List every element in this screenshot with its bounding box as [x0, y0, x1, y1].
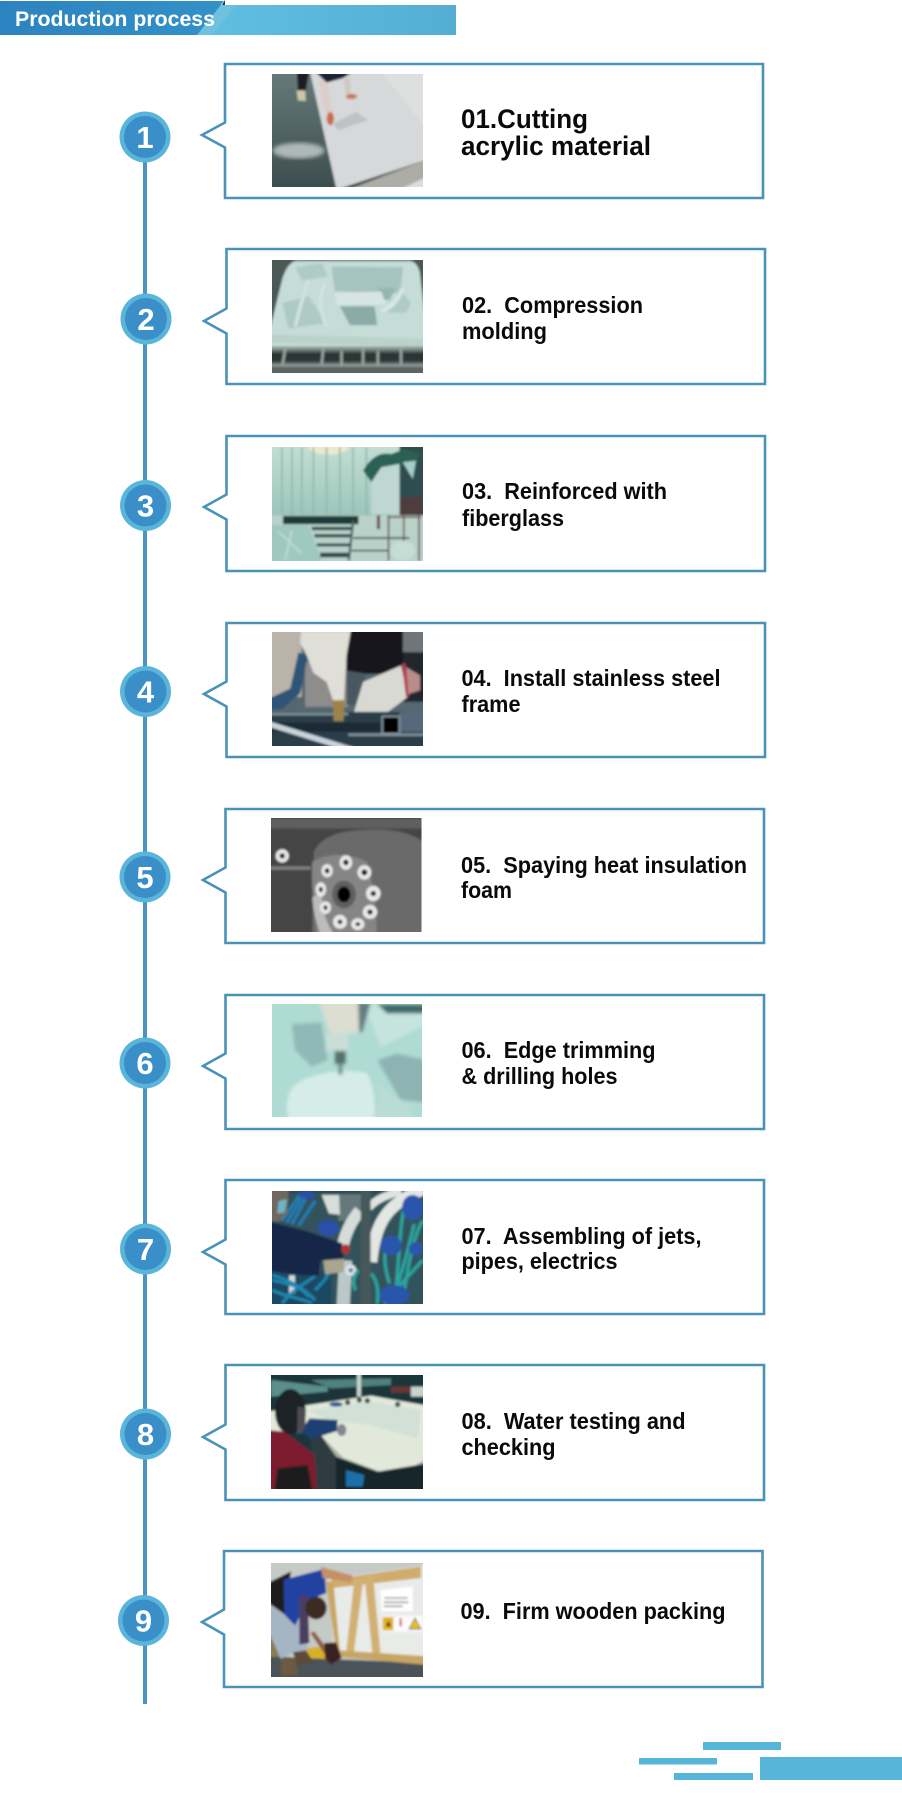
badge 6: [120, 1038, 170, 1088]
badge 4: 4: [137, 674, 155, 710]
photo: water testing: [271, 1375, 423, 1489]
photo: cutting acrylic: [272, 74, 423, 187]
step label 7: [462, 1223, 702, 1274]
heading: Production process: [15, 8, 215, 31]
step label 3: 03. Reinforced with: [462, 478, 667, 504]
badge 7: 7: [137, 1232, 154, 1267]
timeline line: [143, 137, 147, 1704]
step label 6: & drilling holes: [462, 1063, 618, 1089]
step label 5: foam: [461, 877, 512, 903]
step label 3: fiberglass: [462, 505, 564, 531]
photo: wooden packing: [271, 1563, 423, 1677]
photo: fiberglass workshop: [272, 447, 423, 561]
badge 4: [120, 666, 171, 717]
step label 3: [462, 478, 667, 531]
badge 5: [120, 852, 170, 902]
badge 6: 6: [136, 1046, 154, 1081]
step label 2: molding: [462, 318, 547, 344]
callout box 9: [202, 1551, 762, 1687]
panel: step 7: [120, 1180, 764, 1314]
step label 4: [462, 665, 720, 717]
step label 5: [461, 852, 747, 903]
step label 9: 09. Firm wooden packing: [460, 1598, 726, 1624]
photo: assembling jets and pipes: [272, 1191, 423, 1304]
step label 2: 02. Compression: [462, 292, 643, 318]
step label 8: checking: [462, 1434, 556, 1460]
callout box 8: [203, 1365, 764, 1500]
photo: insulation foam: [271, 818, 422, 932]
panel: step 9: [118, 1551, 762, 1687]
badge 1: 1: [136, 120, 154, 155]
panel: step 2: [120, 249, 765, 384]
badge 2: 2: [137, 302, 155, 337]
photo: installing steel frame: [272, 632, 423, 746]
step label 6: 06. Edge trimming: [462, 1037, 656, 1063]
badge 5: 5: [136, 860, 154, 895]
step label 7: 07. Assembling of jets,: [462, 1223, 702, 1249]
badge 3: 3: [137, 488, 154, 524]
callout box 7: [203, 1180, 764, 1314]
photo: compression molding: [272, 260, 423, 373]
photo: edge trimming: [272, 1004, 422, 1117]
badge 1: [120, 112, 170, 162]
callout box 6: [203, 995, 764, 1129]
step label 1: acrylic material: [461, 131, 651, 161]
callout box 2: [204, 249, 765, 384]
step label 1: [461, 104, 651, 161]
panel: step 6: [120, 995, 764, 1129]
panel: step 8: [120, 1365, 764, 1500]
badge 7: [120, 1224, 171, 1274]
callout box 1: [202, 64, 763, 198]
step label 8: [462, 1408, 686, 1460]
badge 8: [120, 1408, 171, 1460]
step label 8: 08. Water testing and: [462, 1408, 686, 1434]
step label 7: pipes, electrics: [462, 1248, 618, 1274]
step label 2: [462, 292, 643, 344]
badge 9: 9: [135, 1604, 152, 1638]
header banner: [0, 0, 456, 35]
footer decorative bars: [639, 1742, 902, 1780]
panel: step 4: [120, 623, 765, 757]
step label 1: 01.Cutting: [461, 104, 588, 134]
callout box 5: [203, 809, 764, 943]
panel: step 3: [120, 436, 765, 571]
badge 3: [120, 480, 171, 531]
step label 4: 04. Install stainless steel: [462, 665, 720, 691]
panel: step 5: [120, 809, 764, 943]
badge 9: [118, 1595, 169, 1646]
badge 8: 8: [137, 1417, 154, 1452]
step label 6: [462, 1037, 656, 1089]
step label 4: frame: [462, 691, 520, 717]
badge 2: [120, 294, 172, 344]
panel: step 1: [120, 64, 763, 198]
callout box 3: [204, 436, 765, 571]
step label 5: 05. Spaying heat insulation: [461, 852, 747, 878]
callout box 4: [204, 623, 765, 757]
